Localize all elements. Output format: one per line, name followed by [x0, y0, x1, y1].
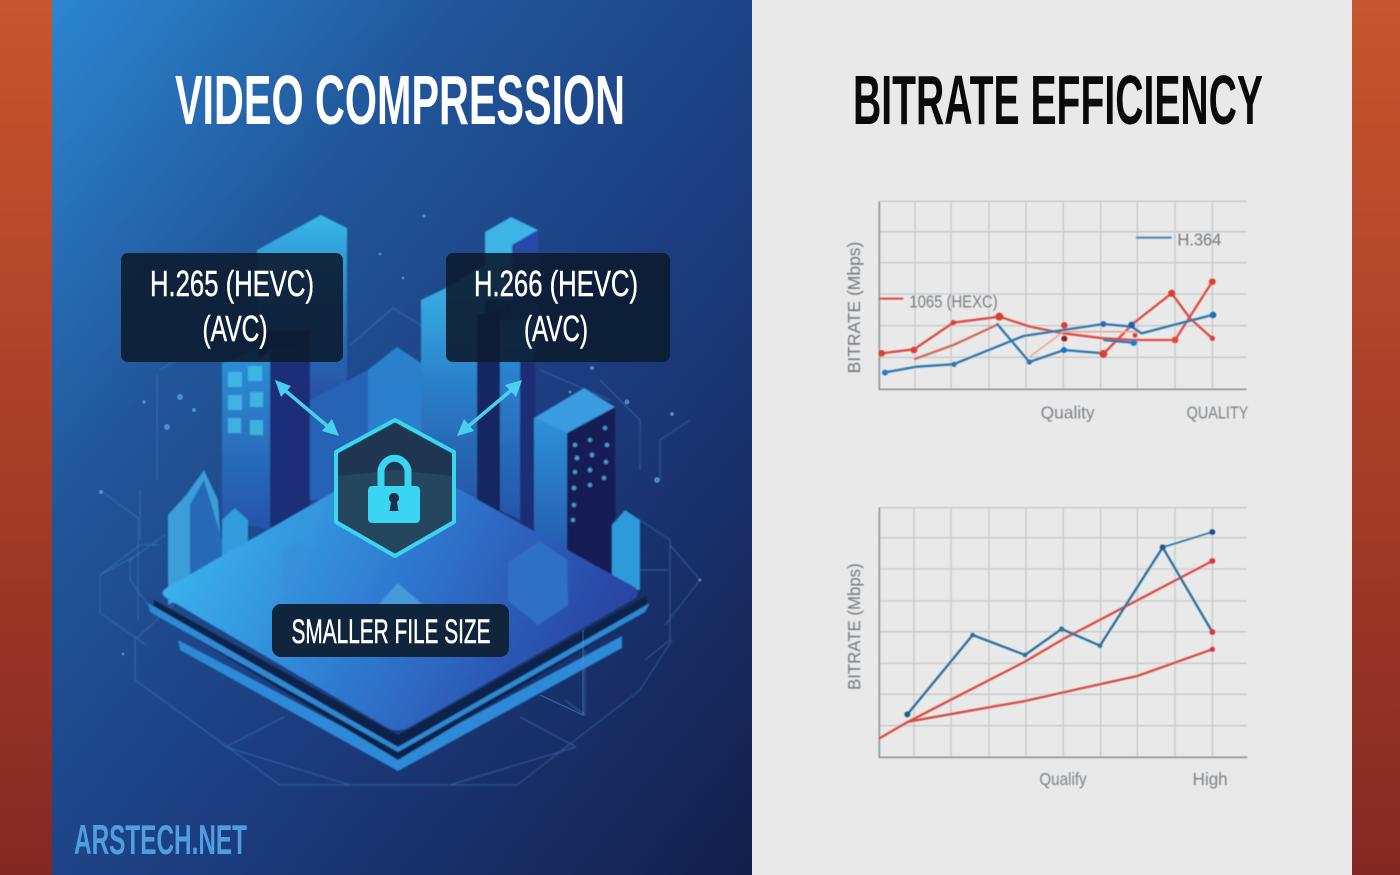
chart: top line chart	[844, 201, 1248, 422]
data markers	[878, 278, 1216, 376]
keyhole	[389, 493, 399, 511]
legend: HEVC	[879, 291, 998, 311]
callout: smaller file size	[272, 604, 509, 657]
background dots	[99, 214, 702, 655]
callout: smaller file size: SMALLER FILE SIZE	[292, 613, 490, 651]
callout: right codec label: (AVC)	[524, 308, 588, 349]
y axis label: BITRATE (Mbps)	[844, 563, 864, 690]
blue upper segment	[1163, 532, 1212, 547]
x axis label: high: High	[1193, 769, 1228, 789]
lower platform layer	[178, 636, 622, 771]
panel: bitrate efficiency	[752, 0, 1352, 875]
x axis label: quality: Quality	[1041, 402, 1095, 422]
blue series	[883, 315, 1212, 373]
y axis label: BITRATE (Mbps)	[844, 242, 864, 373]
padlock body	[368, 486, 420, 523]
blue series	[907, 547, 1212, 714]
arrow: right codec to lock	[457, 380, 522, 436]
callout: left codec label	[121, 253, 343, 362]
red series	[879, 561, 1212, 738]
platform top surface	[162, 455, 638, 730]
chart axes	[879, 508, 1247, 757]
arrow: left codec to lock	[275, 380, 339, 436]
building: centre block	[310, 347, 421, 500]
icon: padlock in hexagon	[336, 420, 454, 556]
building windows	[228, 366, 263, 435]
legend: H.364: H.364	[1177, 229, 1221, 249]
circuit line overlay	[540, 630, 583, 715]
isometric platform	[148, 455, 650, 771]
callout: left codec label: (AVC)	[202, 308, 268, 349]
callout: right codec label: H.266 (HEVC)	[474, 263, 638, 304]
circuit line network	[100, 308, 700, 785]
platform cubes	[283, 541, 568, 625]
padlock shackle	[381, 458, 408, 488]
title: video compression: VIDEO COMPRESSION	[175, 61, 625, 139]
building: right tall towers	[421, 217, 538, 535]
x axis label: QUALITY: QUALITY	[1187, 402, 1248, 422]
watermark: ARSTECH.NET	[74, 816, 247, 863]
legend: HEVC: 1065 (HEXC)	[909, 291, 998, 311]
callout: right codec label	[446, 253, 670, 362]
panel: video compression	[52, 0, 752, 875]
chart axes	[879, 201, 1247, 389]
chart: bottom line chart	[844, 508, 1247, 789]
isometric city buildings	[168, 215, 640, 605]
building: right data tower	[534, 388, 640, 590]
data markers	[904, 529, 1215, 717]
red series	[882, 282, 1212, 359]
platform blue rim	[148, 603, 650, 752]
server lights	[571, 426, 609, 522]
hexagon badge	[336, 420, 454, 556]
building: tall left tower	[222, 215, 347, 530]
callout: left codec label: H.265 (HEVC)	[150, 263, 314, 304]
building: small left skyline	[168, 470, 248, 605]
hexagon upper shade	[338, 424, 452, 476]
dark platform layer	[152, 596, 648, 760]
legend: H.364	[1136, 229, 1221, 249]
x axis label: qualify: Qualify	[1039, 769, 1087, 789]
